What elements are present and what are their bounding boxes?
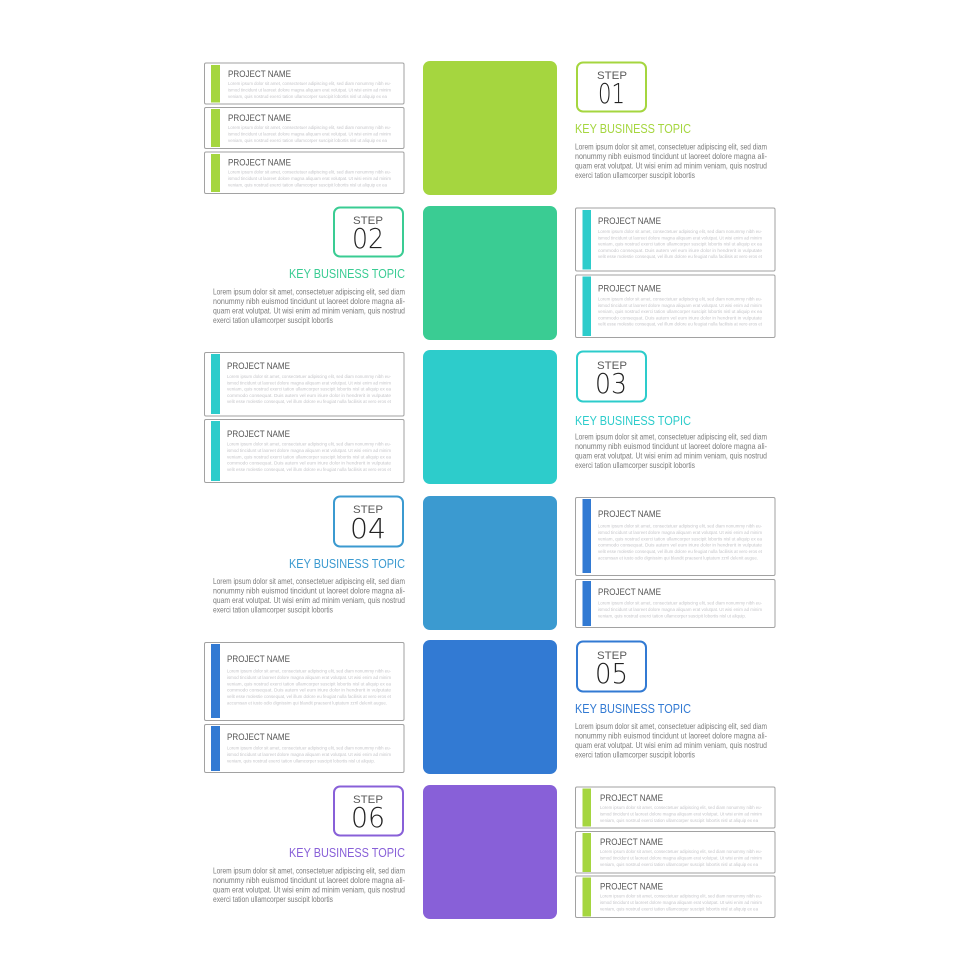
project card 1-2: ismod tincidunt ut laoreet dolore magna aliquam erat volutpat. Ut wisi enim ad minim xyxy=(228,132,391,138)
panel: step 4 topic xyxy=(213,496,405,614)
step badge 05: STEP xyxy=(597,650,627,662)
square: step 4 xyxy=(423,496,557,630)
project card 3-2: veniam, quis nostrud exerci tation ullamcorper suscipit lobortis nisl ut aliquip ex ea xyxy=(227,454,391,460)
step badge 04: STEP xyxy=(353,504,383,516)
panel: step 3 topic xyxy=(575,352,767,470)
project card 5-1: ismod tincidunt ut laoreet dolore magna aliquam erat volutpat. Ut wisi enim ad minim xyxy=(227,675,391,681)
step badge 04: 04 xyxy=(350,512,386,545)
project card 6-2: Lorem ipsum dolor sit amet, consectetuer adipiscing elit, sed diam nonummy nibh eu- xyxy=(600,849,762,855)
project card 2-1: ismod tincidunt ut laoreet dolore magna aliquam erat volutpat. Ut wisi enim ad minim xyxy=(598,235,762,241)
project card 3-1: PROJECT NAME xyxy=(227,361,290,372)
step badge 02: STEP xyxy=(353,215,383,227)
project card 6-2 xyxy=(576,832,775,873)
project card 6-3: Lorem ipsum dolor sit amet, consectetuer adipiscing elit, sed diam nonummy nibh eu- xyxy=(600,894,762,900)
project card 6-1: veniam, quis nostrud exerci tation ullamcorper suscipit lobortis nisl ut aliquip ex ea xyxy=(600,818,758,824)
panel: step 4 projects xyxy=(576,498,775,628)
project card 1-2: veniam, quis nostrud exerci tation ullamcorper suscipit lobortis nisl ut aliquip ex ea xyxy=(228,138,387,144)
project card 1-3: PROJECT NAME xyxy=(228,158,291,168)
project card 3-2: ismod tincidunt ut laoreet dolore magna aliquam erat volutpat. Ut wisi enim ad minim xyxy=(227,448,391,454)
project card 2-1: velit esse molestie consequat, vel illum dolore eu feugiat nulla facilisis at vero eros et xyxy=(598,254,763,260)
text block: topic 5: quam erat volutpat. Ut wisi enim ad minim veniam, quis nostrud xyxy=(575,741,767,750)
project card 3-2: Lorem ipsum dolor sit amet, consectetuer adipiscing elit, sed diam nonummy nibh eu- xyxy=(227,442,391,448)
project card 4-2 xyxy=(576,580,775,628)
project card 6-3: ismod tincidunt ut laoreet dolore magna aliquam erat volutpat. Ut wisi enim ad minim xyxy=(600,900,762,906)
text block: topic 1: Lorem ipsum dolor sit amet, consectetuer adipiscing elit, sed diam xyxy=(575,142,767,152)
project card 5-1: veniam, quis nostrud exerci tation ullamcorper suscipit lobortis nisl ut aliquip ex ea xyxy=(227,681,391,687)
text block: topic 2: exerci tation ullamcorper suscipit lobortis xyxy=(213,316,333,325)
project card 3-1 xyxy=(204,352,404,416)
project card 5-2 xyxy=(204,724,404,772)
heading: topic 2: KEY BUSINESS TOPIC xyxy=(289,267,405,281)
project card 1-3: ismod tincidunt ut laoreet dolore magna aliquam erat volutpat. Ut wisi enim ad minim xyxy=(228,176,391,182)
project card 1-1: Lorem ipsum dolor sit amet, consectetuer adipiscing elit, sed diam nonummy nibh eu- xyxy=(228,81,391,87)
step badge 03: STEP xyxy=(597,360,627,372)
text block: topic 3: quam erat volutpat. Ut wisi enim ad minim veniam, quis nostrud xyxy=(575,452,767,460)
step badge 04 xyxy=(334,496,403,546)
text block: topic 6: exerci tation ullamcorper suscipit lobortis xyxy=(213,895,333,904)
text block: topic 1: quam erat volutpat. Ut wisi enim ad minim veniam, quis nostrud xyxy=(575,162,767,170)
heading: topic 3: KEY BUSINESS TOPIC xyxy=(575,414,691,428)
step badge 03 xyxy=(577,352,646,402)
project card 5-2: ismod tincidunt ut laoreet dolore magna aliquam erat volutpat. Ut wisi enim ad minim xyxy=(227,752,391,758)
project card 6-1: ismod tincidunt ut laoreet dolore magna aliquam erat volutpat. Ut wisi enim ad minim xyxy=(600,812,762,818)
heading: topic 5: KEY BUSINESS TOPIC xyxy=(575,702,691,716)
project card 1-2: Lorem ipsum dolor sit amet, consectetuer adipiscing elit, sed diam nonummy nibh eu- xyxy=(228,125,391,131)
project card 1-2: PROJECT NAME xyxy=(228,113,291,124)
text block: topic 4: Lorem ipsum dolor sit amet, consectetuer adipiscing elit, sed diam xyxy=(213,577,405,586)
project card 5-1: velit esse molestie consequat, vel illum dolore eu feugiat nulla facilisis at vero eros et xyxy=(227,694,392,700)
text block: topic 2 xyxy=(213,288,405,325)
project card 4-2: PROJECT NAME xyxy=(598,587,661,598)
text block: topic 1 xyxy=(575,142,767,180)
text block: topic 1: exerci tation ullamcorper suscipit lobortis xyxy=(575,171,695,180)
text block: topic 5: Lorem ipsum dolor sit amet, consectetuer adipiscing elit, sed diam xyxy=(575,722,767,731)
project card 4-2: veniam, quis nostrud exerci tation ullamcorper suscipit lobortis nisl ut aliquip. xyxy=(598,613,746,619)
project card 2-2: velit esse molestie consequat, vel illum dolore eu feugiat nulla facilisis at vero eros et xyxy=(598,322,763,328)
text block: topic 2: Lorem ipsum dolor sit amet, consectetuer adipiscing elit, sed diam xyxy=(213,288,405,296)
text block: topic 5: nonummy nibh euismod tincidunt ut laoreet dolore magna ali- xyxy=(575,732,767,740)
text block: topic 3 xyxy=(575,432,767,470)
project card 2-1: commodo consequat. Duis autem vel eum iriure dolor in hendrerit in vulputate xyxy=(598,248,762,254)
panel: step 6 topic xyxy=(213,786,405,904)
project card 4-1: Lorem ipsum dolor sit amet, consectetuer adipiscing elit, sed diam nonummy nibh eu- xyxy=(598,524,762,530)
project card 4-1: commodo consequat. Duis autem vel eum iriure dolor in hendrerit in vulputate xyxy=(598,543,762,549)
project card 5-1 xyxy=(204,642,404,720)
square: step 3 xyxy=(423,350,557,484)
panel: step 2 projects xyxy=(576,208,775,338)
project card 3-2 xyxy=(204,420,404,482)
step badge 03: 03 xyxy=(595,367,627,400)
step badge 02: 02 xyxy=(352,222,384,255)
step badge 01: STEP xyxy=(597,70,627,82)
project card 5-2: Lorem ipsum dolor sit amet, consectetuer adipiscing elit, sed diam nonummy nibh eu- xyxy=(227,746,391,752)
project card 6-2: ismod tincidunt ut laoreet dolore magna aliquam erat volutpat. Ut wisi enim ad minim xyxy=(600,856,762,862)
project card 5-1: commodo consequat. Duis autem vel eum iriure dolor in hendrerit in vulputate xyxy=(227,688,391,694)
project card 4-1: velit esse molestie consequat, vel illum dolore eu feugiat nulla facilisis at vero eros et xyxy=(598,549,763,555)
project card 3-1: commodo consequat. Duis autem vel eum iriure dolor in hendrerit in vulputate xyxy=(227,393,391,399)
text block: topic 1: nonummy nibh euismod tincidunt ut laoreet dolore magna ali- xyxy=(575,152,767,161)
project card 3-2: PROJECT NAME xyxy=(227,429,290,440)
heading: topic 1: KEY BUSINESS TOPIC xyxy=(575,122,691,136)
project card 4-1: PROJECT NAME xyxy=(598,509,661,520)
project card 1-1 xyxy=(204,63,404,104)
project card 6-3: veniam, quis nostrud exerci tation ullamcorper suscipit lobortis nisl ut aliquip ex ea xyxy=(600,906,758,912)
text block: topic 5 xyxy=(575,722,767,760)
step badge 06: STEP xyxy=(353,794,383,806)
project card 2-1: veniam, quis nostrud exerci tation ullamcorper suscipit lobortis nisl ut aliquip ex ea xyxy=(598,242,762,248)
project card 4-2: Lorem ipsum dolor sit amet, consectetuer adipiscing elit, sed diam nonummy nibh eu- xyxy=(598,600,762,606)
step badge 02 xyxy=(334,208,403,256)
text block: topic 4: nonummy nibh euismod tincidunt ut laoreet dolore magna ali- xyxy=(213,586,405,596)
project card 2-1 xyxy=(576,208,775,271)
text block: topic 6: nonummy nibh euismod tincidunt ut laoreet dolore magna ali- xyxy=(213,876,405,885)
square: step 6 xyxy=(423,785,557,919)
project card 5-2: veniam, quis nostrud exerci tation ullamcorper suscipit lobortis nisl ut aliquip. xyxy=(227,758,375,764)
step badge 05 xyxy=(577,642,646,692)
project card 5-1: Lorem ipsum dolor sit amet, consectetuer adipiscing elit, sed diam nonummy nibh eu- xyxy=(227,668,391,674)
text block: topic 6: quam erat volutpat. Ut wisi enim ad minim veniam, quis nostrud xyxy=(213,886,405,894)
text block: topic 3: exerci tation ullamcorper suscipit lobortis xyxy=(575,461,695,470)
project card 6-1 xyxy=(576,787,775,828)
step badge 06 xyxy=(334,786,403,836)
project card 6-3: PROJECT NAME xyxy=(600,882,663,892)
project card 2-1: Lorem ipsum dolor sit amet, consectetuer adipiscing elit, sed diam nonummy nibh eu- xyxy=(598,229,762,235)
text block: topic 4: quam erat volutpat. Ut wisi enim ad minim veniam, quis nostrud xyxy=(213,596,405,605)
project card 1-3 xyxy=(204,152,404,194)
project card 3-1: Lorem ipsum dolor sit amet, consectetuer adipiscing elit, sed diam nonummy nibh eu- xyxy=(227,374,391,380)
panel: step 2 topic xyxy=(213,208,405,325)
project card 6-2: PROJECT NAME xyxy=(600,837,663,848)
project card 1-3: veniam, quis nostrud exerci tation ullamcorper suscipit lobortis nisl ut aliquip ex ea xyxy=(228,182,387,188)
step badge 01: 01 xyxy=(598,77,625,110)
text block: topic 6 xyxy=(213,866,405,904)
text block: topic 3: nonummy nibh euismod tincidunt ut laoreet dolore magna ali- xyxy=(575,442,767,451)
project card 3-2: velit esse molestie consequat, vel illum dolore eu feugiat nulla facilisis at vero eros et xyxy=(227,467,392,473)
project card 2-2: veniam, quis nostrud exerci tation ullamcorper suscipit lobortis nisl ut aliquip ex ea xyxy=(598,309,762,315)
project card 5-1: accumsan et iusto odio dignissim qui blandit praesent luptatum zzril delenit augue. xyxy=(227,700,387,706)
project card 4-1: ismod tincidunt ut laoreet dolore magna aliquam erat volutpat. Ut wisi enim ad minim xyxy=(598,530,762,536)
text block: topic 4: exerci tation ullamcorper suscipit lobortis xyxy=(213,606,333,614)
panel: step 3 projects xyxy=(204,352,404,482)
project card 1-1: veniam, quis nostrud exerci tation ullamcorper suscipit lobortis nisl ut aliquip ex ea xyxy=(228,94,387,100)
project card 4-2: ismod tincidunt ut laoreet dolore magna aliquam erat volutpat. Ut wisi enim ad minim xyxy=(598,607,762,613)
project card 1-1: PROJECT NAME xyxy=(228,69,291,80)
square: step 1 xyxy=(423,61,557,195)
project card 4-1: accumsan et iusto odio dignissim qui blandit praesent luptatum zzril delenit augue. xyxy=(598,556,758,562)
project card 3-1: veniam, quis nostrud exerci tation ullamcorper suscipit lobortis nisl ut aliquip ex ea xyxy=(227,387,391,393)
project card 6-1: PROJECT NAME xyxy=(600,793,663,804)
project card 2-2: ismod tincidunt ut laoreet dolore magna aliquam erat volutpat. Ut wisi enim ad minim xyxy=(598,303,762,309)
project card 3-1: ismod tincidunt ut laoreet dolore magna aliquam erat volutpat. Ut wisi enim ad minim xyxy=(227,380,391,386)
project card 2-2: PROJECT NAME xyxy=(598,284,661,294)
text block: topic 4 xyxy=(213,577,405,614)
panel: step 5 topic xyxy=(575,642,767,760)
project card 2-2 xyxy=(576,275,775,338)
project card 3-1: velit esse molestie consequat, vel illum dolore eu feugiat nulla facilisis at vero eros et xyxy=(227,399,392,405)
panel: step 1 projects xyxy=(204,63,404,194)
project card 6-3 xyxy=(576,876,775,918)
project card 5-1: PROJECT NAME xyxy=(227,654,290,665)
project card 4-1 xyxy=(576,498,775,576)
text block: topic 5: exerci tation ullamcorper suscipit lobortis xyxy=(575,750,695,760)
project card 2-2: commodo consequat. Duis autem vel eum iriure dolor in hendrerit in vulputate xyxy=(598,315,762,321)
panel: step 6 projects xyxy=(576,787,775,918)
square: step 5 xyxy=(423,640,557,774)
panel: step 1 topic xyxy=(575,62,767,180)
project card 3-2: commodo consequat. Duis autem vel eum iriure dolor in hendrerit in vulputate xyxy=(227,461,391,467)
square: step 2 xyxy=(423,206,557,340)
text block: topic 2: nonummy nibh euismod tincidunt ut laoreet dolore magna ali- xyxy=(213,297,405,306)
project card 2-2: Lorem ipsum dolor sit amet, consectetuer adipiscing elit, sed diam nonummy nibh eu- xyxy=(598,296,762,302)
text block: topic 6: Lorem ipsum dolor sit amet, consectetuer adipiscing elit, sed diam xyxy=(213,866,405,876)
step badge 05: 05 xyxy=(595,657,628,690)
text block: topic 2: quam erat volutpat. Ut wisi enim ad minim veniam, quis nostrud xyxy=(213,306,405,316)
heading: topic 6: KEY BUSINESS TOPIC xyxy=(289,846,405,860)
project card 1-2 xyxy=(204,108,404,148)
project card 1-1: ismod tincidunt ut laoreet dolore magna aliquam erat volutpat. Ut wisi enim ad minim xyxy=(228,88,391,94)
project card 6-2: veniam, quis nostrud exerci tation ullamcorper suscipit lobortis nisl ut aliquip ex ea xyxy=(600,862,758,868)
project card 6-1: Lorem ipsum dolor sit amet, consectetuer adipiscing elit, sed diam nonummy nibh eu- xyxy=(600,805,762,811)
project card 4-1: veniam, quis nostrud exerci tation ullamcorper suscipit lobortis nisl ut aliquip ex ea xyxy=(598,536,762,542)
text block: topic 3: Lorem ipsum dolor sit amet, consectetuer adipiscing elit, sed diam xyxy=(575,432,767,442)
panel: step 5 projects xyxy=(204,642,404,772)
step badge 01 xyxy=(577,62,646,112)
project card 5-2: PROJECT NAME xyxy=(227,732,290,743)
project card 1-3: Lorem ipsum dolor sit amet, consectetuer adipiscing elit, sed diam nonummy nibh eu- xyxy=(228,170,391,176)
step badge 06: 06 xyxy=(351,801,385,834)
heading: topic 4: KEY BUSINESS TOPIC xyxy=(289,557,405,571)
project card 2-1: PROJECT NAME xyxy=(598,216,661,227)
